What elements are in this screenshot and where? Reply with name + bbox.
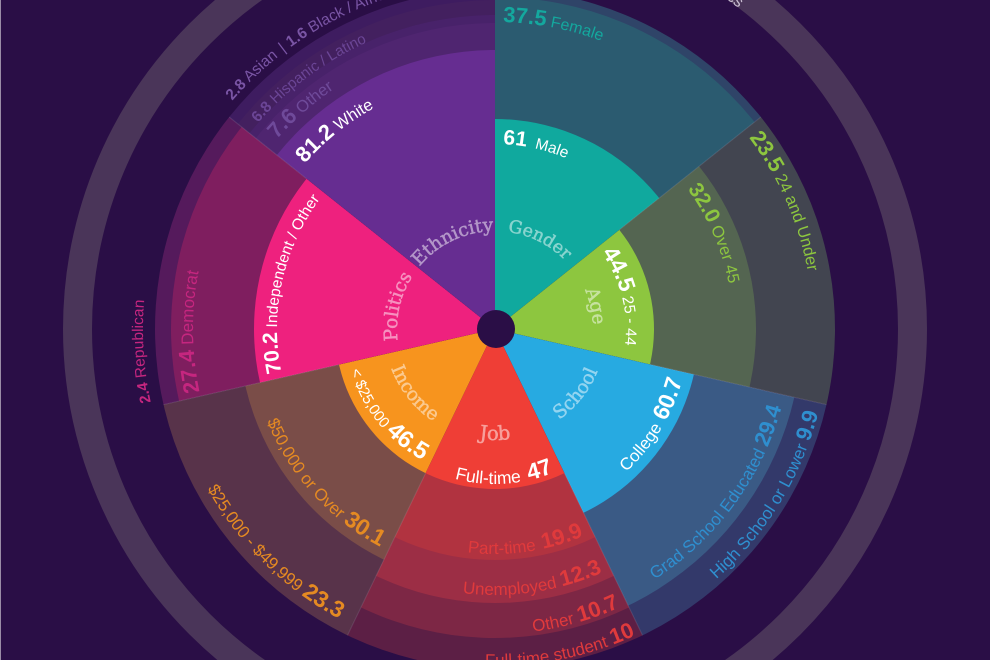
label: democrat: 27.4 Democrat (178, 270, 200, 394)
label: 24 and under: 23.5 24 and Under (750, 131, 816, 270)
label: white: 81.2 White (296, 102, 372, 162)
label: 25-44: 44.5 25 - 44 (604, 250, 636, 346)
center hub (477, 310, 515, 348)
label: full-time: Full-time 47 (456, 458, 548, 484)
panel: job (348, 346, 642, 660)
income heading: Income (391, 364, 437, 420)
label: college: College 60.7 (620, 376, 680, 470)
label: independent: 70.2 Independent / Other (262, 194, 318, 374)
panel: gender (495, 0, 761, 317)
gender heading: Gender (509, 220, 572, 259)
panel: school (504, 334, 826, 636)
age rings (510, 117, 835, 404)
age heading: Age (584, 289, 603, 324)
label: female: 37.5 Female (504, 6, 603, 40)
income rings (164, 333, 487, 636)
panel: ethnicity (226, 0, 495, 318)
panel: age (510, 117, 835, 404)
panel: politics (132, 117, 481, 404)
school heading: School (553, 367, 598, 418)
label: high school: High School or Lower 9.9 (710, 410, 818, 578)
label: 50k or over: $50,000 or Over 30.1 (268, 418, 384, 546)
politics rings (155, 117, 481, 404)
label: other: 7.6 Other (266, 82, 332, 137)
job rings (348, 346, 642, 660)
label: part-time: Part-time 19.9 (468, 523, 582, 554)
label: unemployed: Unemployed 12.3 (464, 560, 601, 598)
ethnicity rings (230, 0, 495, 318)
label: republican: 2.4 Republican (132, 300, 151, 404)
label: other: Other 10.7 (533, 594, 614, 631)
panel: income (164, 333, 487, 636)
politics heading: Politics (383, 272, 412, 341)
label: grad school: Grad School Educated 29.4 (650, 405, 781, 578)
label: over 45: 32.0 Over 45 (689, 183, 740, 283)
ethnicity heading: Ethnicity (410, 220, 494, 266)
label: hispanic: 6.8 Hispanic / Latino (252, 36, 366, 121)
gender rings (495, 0, 761, 317)
label: 25k to 50k: $25,000 - $49,999 23.3 (208, 484, 344, 617)
job heading: Job (476, 424, 510, 444)
wheel chart (132, 0, 835, 660)
label: male: 61 Male (504, 130, 568, 158)
school rings (504, 334, 826, 636)
label: under 25k: < $25,000 46.5 (354, 369, 430, 458)
